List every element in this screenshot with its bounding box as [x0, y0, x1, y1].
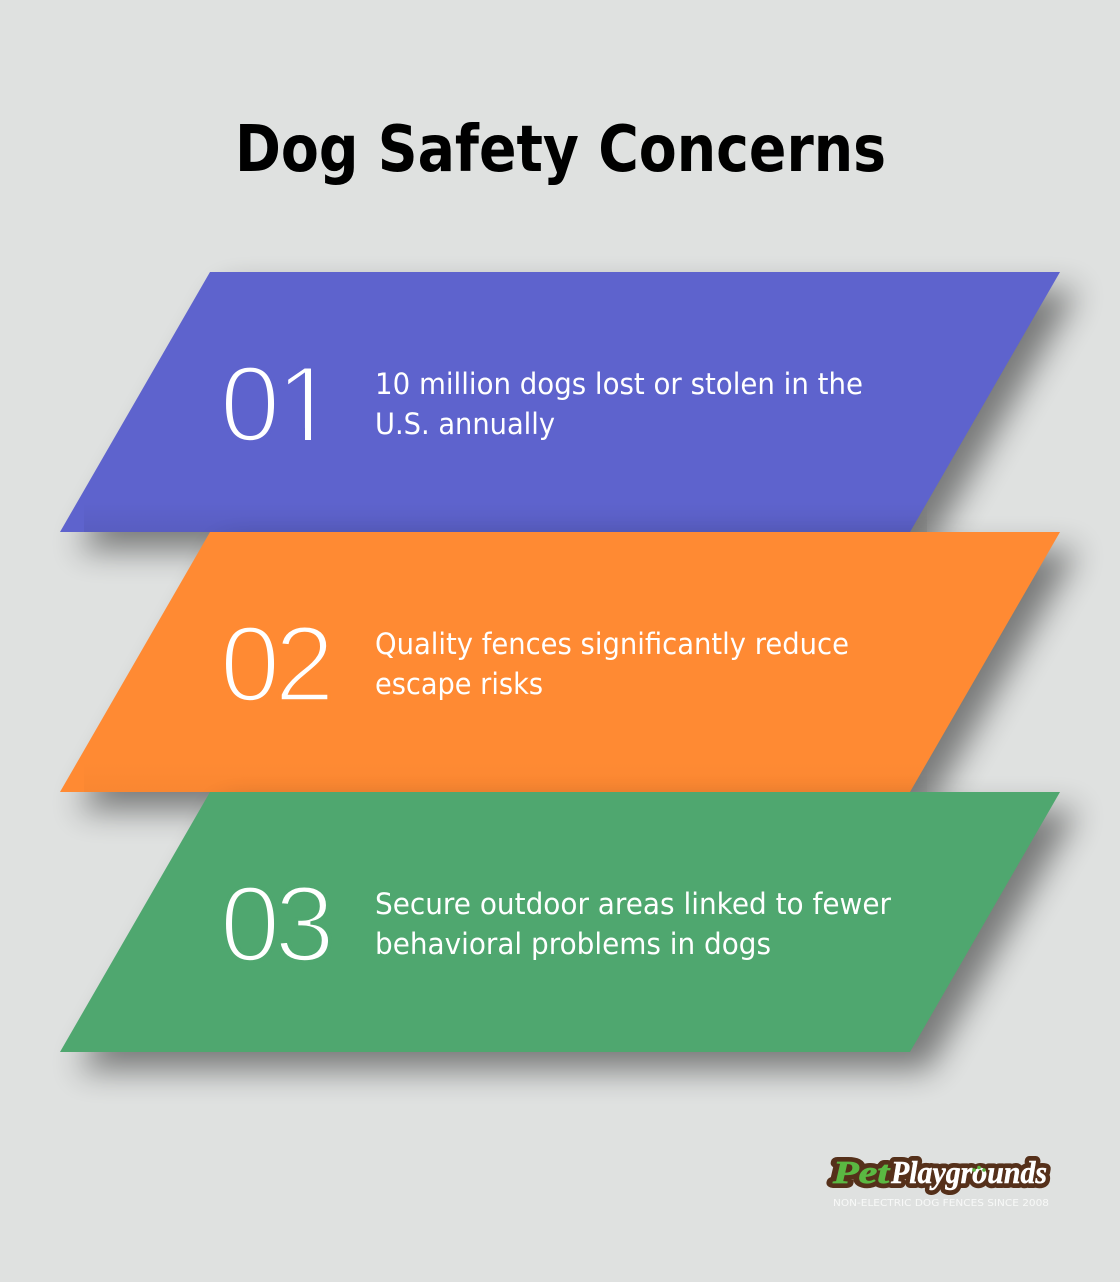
text 01: U.S. annually: [375, 407, 555, 441]
number 01: 1: [276, 343, 336, 464]
panel: 02 quality fences: [60, 532, 1078, 810]
text 02: escape risks: [375, 667, 543, 701]
icon: paw: [972, 1166, 986, 1172]
logo: Pet Playgrounds: Playgrounds: [890, 1154, 1047, 1190]
number 03: 3: [274, 863, 335, 984]
text 02: [375, 627, 849, 701]
text 03: behavioral problems in dogs: [375, 927, 771, 961]
number 02: 0: [220, 603, 280, 724]
text 01: [375, 367, 863, 441]
text 01: 10 million dogs lost or stolen in the: [375, 367, 863, 401]
number 01: [220, 343, 336, 464]
title: Dog Safety Concerns: [235, 113, 886, 187]
logo: Pet Playgrounds: Playgrounds: [890, 1154, 1047, 1190]
panel: 01 lost or stolen: [60, 272, 1078, 550]
text 02: Quality fences significantly reduce: [375, 627, 849, 661]
logo: Pet Playgrounds: [832, 1154, 1049, 1209]
text 03: [375, 887, 891, 961]
text 03: Secure outdoor areas linked to fewer: [375, 887, 891, 921]
logo: Pet Playgrounds: Pet: [832, 1154, 890, 1190]
number 03: 0: [220, 863, 280, 984]
logo: Pet Playgrounds: Pet: [832, 1154, 890, 1190]
number 02: 2: [274, 603, 335, 724]
number 01: 0: [220, 343, 280, 464]
tagline: NON-ELECTRIC DOG FENCES SINCE 2008: [833, 1198, 1049, 1209]
panel: 03 secure outdoor areas: [60, 792, 1078, 1070]
